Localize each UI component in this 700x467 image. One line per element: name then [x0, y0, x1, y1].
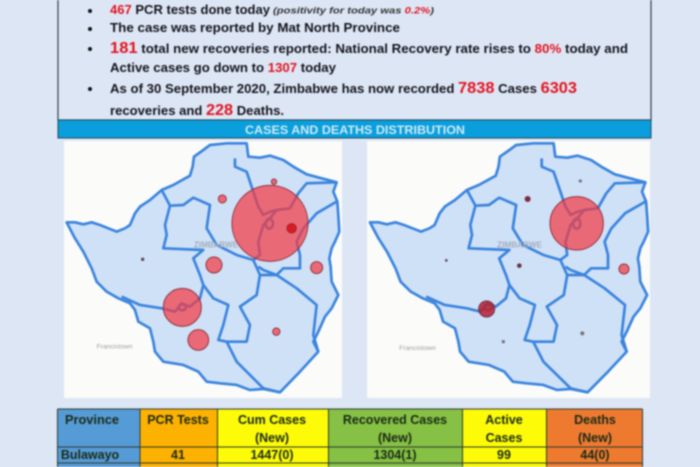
table header: Province [65, 413, 119, 427]
death bubbles [445, 179, 629, 343]
bullet: recoveries: 181 total new recoveries reported: National Recovery rate rises to 80% today and [110, 40, 628, 57]
table row: Bulawayo: 44(0) [580, 448, 610, 462]
table: provincial breakdown [58, 409, 642, 467]
table header: Recovered Cases [343, 413, 447, 427]
bullet: cumulative totals: recoveries and 228 Deaths. [110, 102, 284, 119]
map: cases distribution: ZIMBABWE [194, 241, 239, 250]
table row: Bulawayo: 99 [497, 448, 511, 462]
table header: PCR Tests [147, 413, 209, 427]
table row: Bulawayo: 1447(0) [250, 448, 294, 462]
bullet: PCR tests: (positivity for today was 0.2% ) [273, 6, 434, 16]
table header: (New) [578, 431, 612, 445]
table header: Cum Cases [238, 413, 306, 427]
bullet: PCR tests: 467 PCR tests done today [110, 3, 270, 17]
table header: Cases [486, 431, 522, 445]
bullet: cumulative totals [88, 80, 577, 119]
case bubbles [141, 179, 323, 350]
table header: Active [485, 413, 523, 427]
table header [65, 413, 616, 445]
table header: Deaths [574, 413, 616, 427]
table header: (New) [378, 431, 412, 445]
bullet: PCR tests [88, 3, 434, 17]
table row: Bulawayo: 41 [171, 448, 185, 462]
heading bar: cases and deaths distribution: CASES AND DEATHS DISTRIBUTION [245, 123, 465, 137]
map: cases distribution [64, 141, 342, 398]
bullet: cumulative totals: As of 30 September 2020, Zimbabwe has now recorded 7838 Cases 6303 [110, 80, 577, 97]
table row: Bulawayo: 1304(1) [373, 448, 417, 462]
bullet: recoveries [88, 40, 628, 75]
map: deaths distribution: ZIMBABWE [497, 241, 543, 250]
bullet: recoveries: Active cases go down to 1307 today [110, 61, 336, 75]
panel: key points [58, 0, 651, 120]
table row: Bulawayo: Bulawayo [61, 448, 120, 462]
map: deaths distribution [367, 141, 650, 398]
map: cases distribution: Francistown [97, 343, 133, 350]
table row: Bulawayo [61, 448, 610, 462]
bullet: reporting province: The case was reported by Mat North Province [110, 21, 400, 35]
table header: (New) [255, 431, 289, 445]
heading bar: cases and deaths distribution [58, 120, 651, 138]
map: deaths distribution: Francistown [399, 345, 436, 352]
